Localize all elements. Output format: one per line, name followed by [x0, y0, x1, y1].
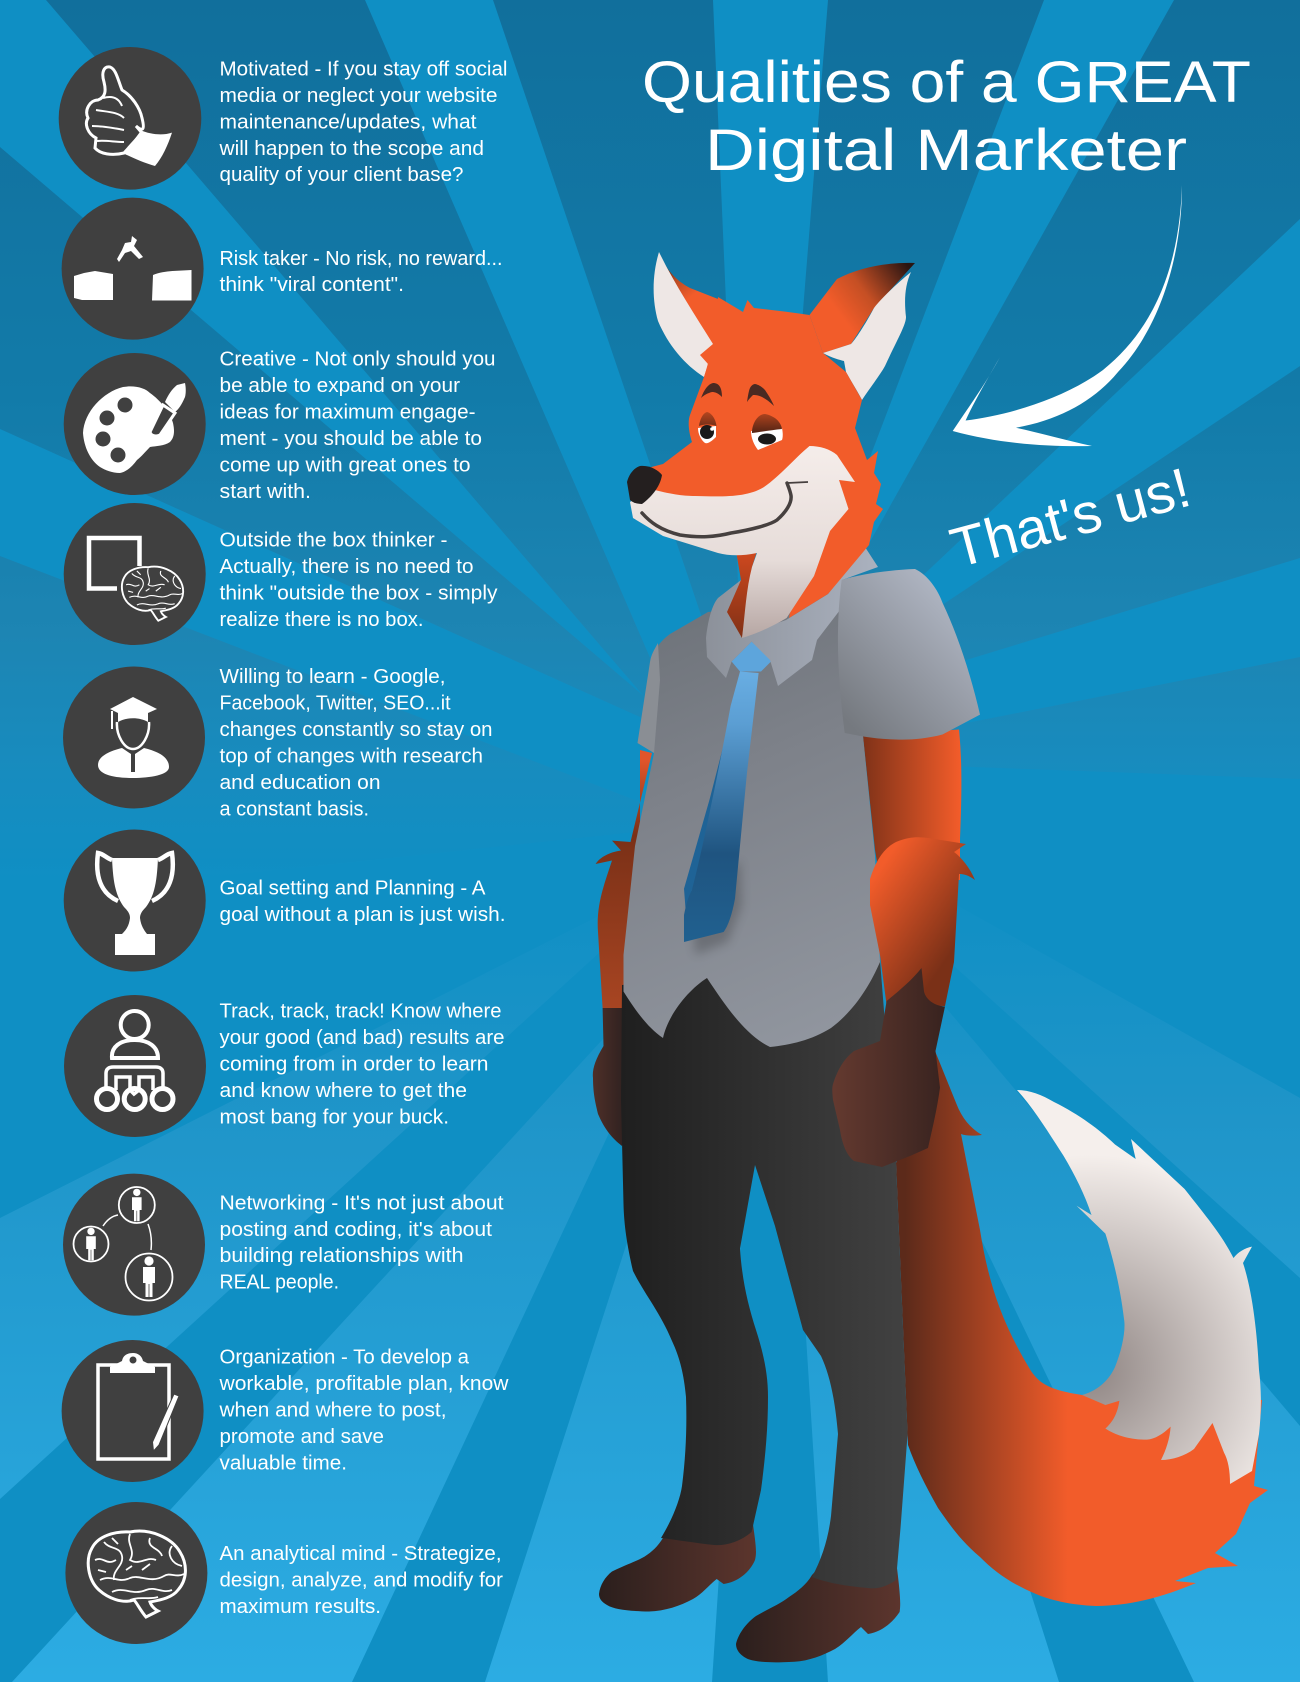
title: Digital Marketer	[705, 118, 1187, 183]
eyebrows	[701, 383, 774, 406]
left shoe	[599, 1515, 756, 1612]
right ear	[810, 263, 915, 353]
text: Outside the box thinker -	[220, 528, 448, 552]
smile	[642, 483, 791, 537]
text: will happen to the scope and	[218, 137, 484, 160]
text: posting and coding, it's about	[220, 1218, 492, 1241]
text: your good (and bad) results are	[220, 1026, 504, 1049]
handwritten callout: That's us!	[944, 455, 1197, 580]
text: valuable time.	[220, 1452, 347, 1474]
text: REAL people.	[220, 1271, 339, 1294]
text: think "viral content".	[220, 273, 404, 296]
left eye	[698, 412, 716, 443]
icon: brain	[65, 1502, 207, 1644]
item 5: willing to learn	[63, 665, 492, 820]
text: building relationships with	[220, 1244, 464, 1267]
text: Track, track, track! Know where	[220, 1000, 502, 1023]
text	[220, 348, 496, 503]
shirt collar	[706, 547, 878, 686]
item 2: risk taker	[62, 198, 502, 340]
item 3: creative	[64, 348, 495, 503]
right shoe	[736, 1550, 900, 1662]
text: Facebook, Twitter, SEO...it	[220, 692, 451, 714]
white muzzle and bib	[630, 446, 855, 638]
icon: clipboard and pencil	[62, 1340, 204, 1482]
text: be able to expand on your	[220, 374, 460, 397]
text: maintenance/updates, what	[220, 110, 477, 134]
right upper arm	[863, 730, 961, 880]
right sleeve	[838, 569, 980, 740]
text: a constant basis.	[220, 798, 369, 820]
title	[642, 50, 1251, 183]
item 1: motivated	[59, 47, 507, 190]
trousers	[621, 960, 908, 1588]
text: workable, profitable plan, know	[218, 1372, 509, 1395]
text: Goal setting and Planning - A	[220, 876, 486, 900]
text: goal without a plan is just wish.	[220, 903, 506, 926]
item 7: track	[64, 995, 504, 1137]
text: Creative - Not only should you	[220, 348, 496, 370]
text: Networking - It's not just about	[220, 1191, 504, 1214]
text	[220, 528, 498, 631]
icon: trophy	[64, 830, 206, 972]
text: come up with great ones to	[220, 454, 470, 476]
right eye	[751, 414, 783, 450]
left hand	[593, 1008, 640, 1146]
text: Risk taker - No risk, no reward...	[220, 247, 502, 270]
shirt torso	[624, 600, 880, 1047]
text	[220, 876, 506, 926]
fox head	[627, 252, 915, 638]
text	[220, 665, 492, 820]
tail white tip	[1017, 1090, 1261, 1484]
text: media or neglect your website	[220, 84, 498, 107]
text: coming from in order to learn	[220, 1053, 488, 1076]
right hand	[832, 968, 945, 1167]
text: Organization - To develop a	[220, 1346, 470, 1369]
text: changes constantly so stay on	[220, 718, 492, 741]
text	[218, 58, 508, 186]
text: top of changes with research	[220, 744, 483, 768]
text: maximum results.	[220, 1595, 381, 1618]
head fur	[640, 297, 883, 618]
tail	[896, 1051, 1268, 1606]
icon: jumper between cliffs	[62, 198, 204, 340]
arrow pointing to fox	[953, 185, 1182, 446]
right forearm	[870, 837, 975, 1006]
text	[218, 1346, 509, 1474]
text: ideas for maximum engage-	[220, 400, 476, 424]
item 9: organization	[62, 1340, 509, 1482]
text: and education on	[220, 771, 380, 794]
left arm	[596, 750, 652, 1012]
text: think "outside the box - simply	[220, 582, 498, 604]
text: start with.	[220, 480, 311, 503]
icon: palette and brush	[64, 353, 206, 495]
text: realize there is no box.	[220, 608, 424, 631]
item 6: goal setting	[64, 830, 505, 972]
text: when and where to post,	[218, 1398, 446, 1422]
left ear	[659, 252, 730, 377]
title: Qualities of a GREAT	[642, 50, 1251, 115]
nose	[627, 466, 662, 504]
text: An analytical mind - Strategize,	[220, 1542, 502, 1565]
text	[220, 1000, 504, 1128]
icon: person and tracking tree	[64, 995, 206, 1137]
text: Willing to learn - Google,	[220, 665, 446, 688]
item 10: analytical mind	[65, 1502, 503, 1644]
text: promote and save	[220, 1425, 384, 1448]
icon: thumbs up	[59, 47, 201, 190]
text: and know where to get the	[220, 1079, 467, 1102]
fox character	[593, 252, 1268, 1662]
text: quality of your client base?	[220, 163, 464, 186]
left sleeve	[638, 643, 660, 753]
text: ment - you should be able to	[220, 427, 482, 450]
icon: connected people	[63, 1174, 205, 1316]
item 4: outside the box	[64, 503, 498, 645]
text	[220, 1542, 503, 1618]
text	[220, 1191, 504, 1294]
text: most bang for your buck.	[220, 1106, 449, 1128]
text: Actually, there is no need to	[220, 555, 474, 578]
item 8: networking	[63, 1174, 504, 1316]
icon: box and brain	[64, 503, 206, 645]
text	[220, 247, 502, 296]
icon: graduate	[63, 666, 205, 808]
neck fur	[727, 551, 757, 638]
tie	[684, 642, 772, 955]
text: design, analyze, and modify for	[220, 1569, 503, 1592]
text: Motivated - If you stay off social	[220, 58, 508, 80]
